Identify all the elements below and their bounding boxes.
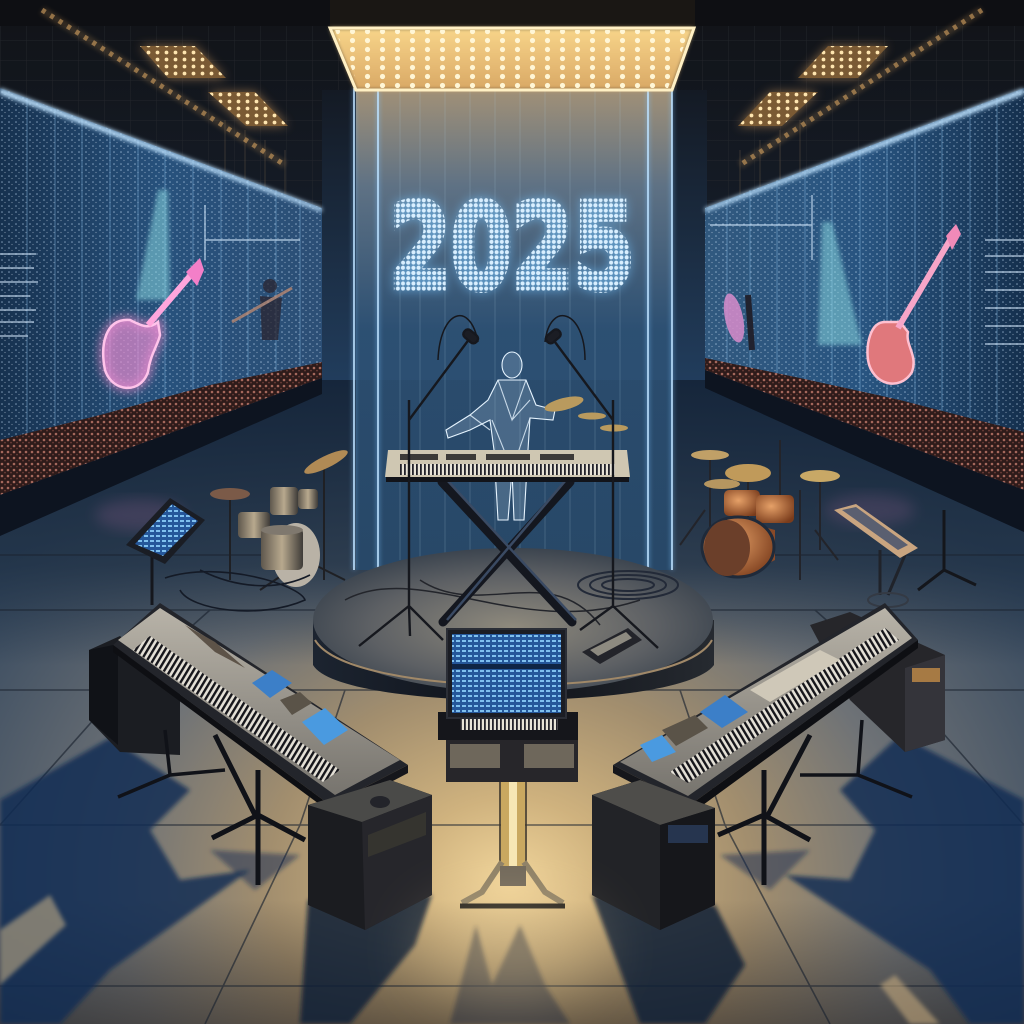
platform: [313, 548, 714, 700]
title: 2025: 2025: [390, 178, 634, 316]
title: 2025: 2025: [390, 178, 634, 316]
central glass column: [354, 88, 672, 570]
microphone stands: [359, 316, 658, 648]
ceiling LED panel: [330, 0, 695, 90]
left keyboard stand: [118, 730, 305, 885]
hologram figure: [446, 352, 555, 520]
left LED wall: [0, 88, 322, 536]
right wall small guitar and figure: [720, 292, 752, 350]
right keyboard stand: [718, 720, 912, 885]
small effects unit on platform: [582, 628, 642, 664]
ceiling and back wall: [0, 0, 1024, 400]
centre console with monitor: [438, 629, 578, 740]
left drum kit: [210, 446, 350, 590]
floor tile lines: [0, 555, 1024, 1024]
right wall guitar hologram: [868, 224, 961, 384]
centre music stand: [446, 740, 578, 906]
right drum kit: [680, 440, 840, 580]
ceiling lights: [42, 10, 982, 165]
left wall guitarist figure: [232, 279, 292, 340]
back-left amplifier: [89, 636, 180, 755]
floor shadows: [0, 735, 1024, 1024]
right music stand and mic stand: [834, 504, 976, 607]
left wall guitar hologram: [103, 258, 204, 388]
front-left amplifier: [308, 780, 432, 930]
small cymbals behind keyboard: [543, 393, 628, 432]
left tablet on stand: [126, 498, 205, 605]
right keyboard: [613, 603, 918, 813]
cables left: [165, 570, 310, 611]
back-right amplifier: [810, 612, 945, 752]
right LED wall: [705, 88, 1024, 532]
left keyboard: [113, 603, 408, 813]
front-right amplifier: [592, 780, 715, 930]
warm light and glare: [0, 895, 940, 1024]
floor: [0, 380, 1024, 1024]
centre X-stand keyboard: [385, 450, 630, 622]
